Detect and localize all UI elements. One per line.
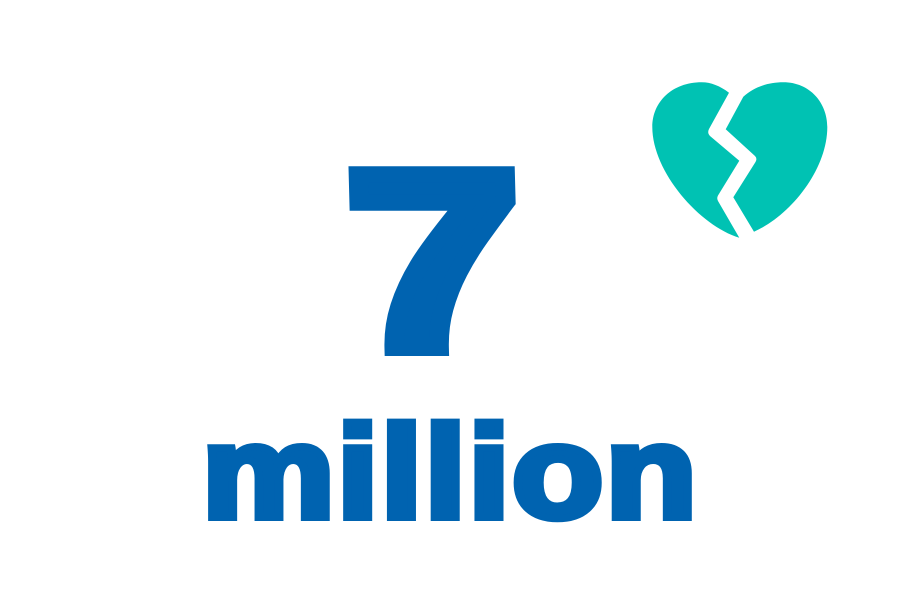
icon: broken heart — [652, 82, 827, 238]
word: million: million — [202, 399, 699, 545]
number: 7: 7 — [344, 120, 525, 402]
